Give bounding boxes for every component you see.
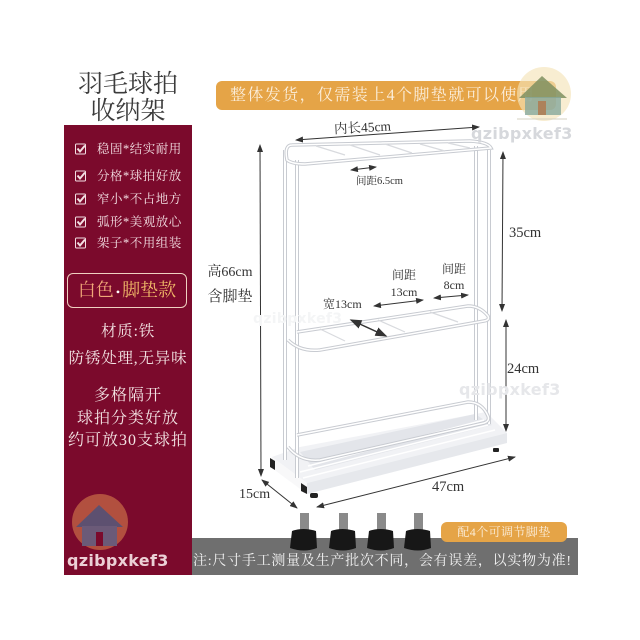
watermark: panel text: qzibpxkef3 [67, 551, 169, 570]
feature 2: 分格*球拍好放 [97, 169, 182, 183]
title: 收纳架 [90, 98, 166, 125]
material text [69, 322, 187, 367]
capacity text [68, 386, 188, 449]
capacity text: 多格隔开 [94, 387, 162, 404]
label: spacing 13 [391, 268, 418, 299]
feature 5: 架子*不用组装 [97, 236, 182, 250]
title: 羽毛球拍 [78, 71, 178, 98]
watermark: top text: qzibpxkef3 [471, 124, 573, 143]
label: 35cm: 35cm [509, 225, 541, 241]
top rail [286, 141, 491, 164]
foot 3 [367, 513, 394, 550]
feature 1: 稳固*结实耐用 [97, 142, 182, 156]
foot 1 [290, 513, 317, 550]
feature 3: 窄小*不占地方 [97, 192, 182, 206]
arrow: height 66 [260, 145, 261, 476]
watermark: faint center text: qzibpxkef3 [253, 311, 342, 327]
label: 15cm: 15cm [239, 487, 270, 502]
arrow: inner length [296, 127, 479, 140]
label: 24cm: 24cm [507, 361, 539, 377]
foot 4 [404, 513, 431, 550]
label: 47cm: 47cm [432, 479, 464, 495]
note: adjustable feet tag: 配4个可调节脚垫 [457, 525, 551, 539]
arrow: spacing 13 [374, 300, 423, 306]
top banner [216, 81, 556, 110]
note: adjustable feet tag [441, 522, 567, 542]
lower shelf [288, 402, 488, 460]
bottom note bar [192, 538, 578, 575]
title [78, 70, 178, 125]
label: spacing 6.5: 间距6.5cm [356, 176, 403, 187]
arrow: length 47 [317, 457, 515, 507]
arrow: depth 15 [262, 480, 297, 508]
foot 2 [329, 513, 356, 550]
label: width 13: 宽13cm [323, 297, 362, 311]
arrow: width 13 [351, 320, 386, 336]
arrow: spacing 6.5 [351, 167, 376, 170]
label: spacing 8 [442, 262, 466, 292]
arrow: 35cm [502, 152, 503, 311]
label: height: 含脚垫 [207, 289, 252, 305]
label: spacing 8: 间距 [442, 262, 466, 276]
capacity text: 球拍分类好放 [77, 410, 179, 426]
capacity text: 约可放30支球拍 [68, 432, 188, 449]
middle shelf [288, 306, 488, 350]
bottom note bar: 注:尺寸手工测量及生产批次不同，会有误差，以实物为准! [193, 554, 572, 569]
colour badge: 白色•脚垫款 [78, 280, 176, 300]
panel: features [64, 125, 192, 575]
rack base [270, 412, 507, 498]
rack posts [285, 146, 489, 478]
colour badge [67, 273, 187, 308]
top banner: 整体发货，仅需装上4个脚垫就可以使用 [230, 87, 535, 104]
material text: 材质:铁 [101, 323, 155, 340]
label: height [207, 264, 253, 305]
label: spacing 13: 间距 [392, 268, 416, 282]
label: inner length: 内长45cm [334, 119, 391, 136]
feature list [75, 142, 182, 250]
arrow: spacing 8 [434, 295, 468, 298]
watermark: middle text: qzibpxkef3 [459, 380, 561, 399]
arrow: 24cm [505, 320, 507, 431]
label: spacing 13: 13cm [391, 285, 417, 299]
label: height: 高66cm [207, 265, 253, 280]
feature 4: 弧形*美观放心 [97, 215, 182, 229]
label: spacing 8: 8cm [444, 278, 464, 292]
material text: 防锈处理,无异味 [69, 350, 187, 367]
